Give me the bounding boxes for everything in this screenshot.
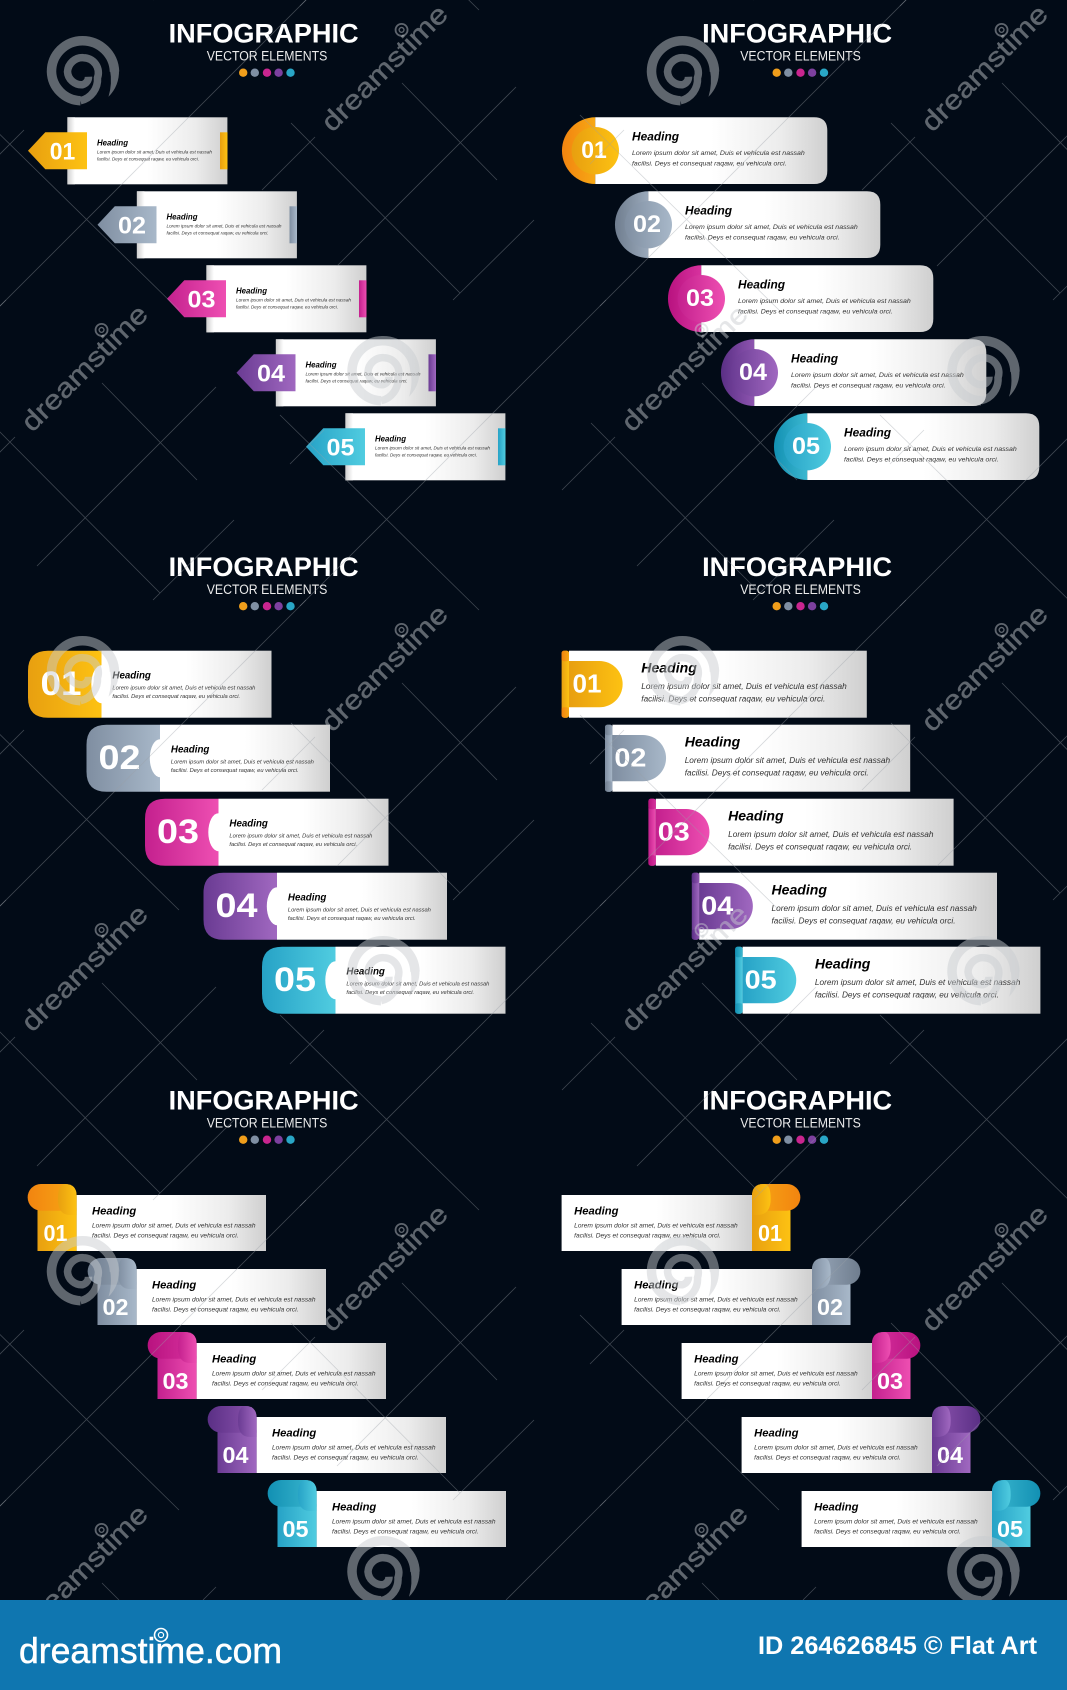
card 05 — [306, 413, 506, 480]
card 02: 02 — [633, 211, 661, 238]
card 05: facilisi. Deys et consequat raqaw, eu vehicula orci. — [346, 990, 474, 996]
panel: large number cards — [28, 552, 506, 1014]
card 03 — [648, 799, 954, 866]
card 01: Heading — [97, 139, 128, 148]
card 01: Lorem ipsum dolor sit amet, Duis et vehicula est nassah — [92, 1223, 256, 1230]
card 04: Heading — [771, 882, 827, 898]
card 03: facilisi. Deys et consequat raqaw, eu vehicula orci. — [694, 1380, 841, 1387]
card 02: Lorem ipsum dolor sit amet, Duis et vehicula est nassah — [166, 224, 282, 228]
card 01: Lorem ipsum dolor sit amet, Duis et vehicula est nassah — [97, 150, 212, 154]
watermark text: dreamstime — [15, 299, 154, 437]
title block — [169, 1086, 359, 1144]
title block: INFOGRAPHIC — [702, 1086, 892, 1116]
title block: VECTOR ELEMENTS — [207, 49, 327, 64]
title block — [169, 19, 359, 77]
card 01: Heading — [92, 1205, 137, 1217]
card 03: 03 — [686, 285, 714, 312]
card 02 — [605, 725, 910, 792]
card 05 — [735, 947, 1040, 1014]
card 02: Lorem ipsum dolor sit amet, Duis et vehicula est nassah — [685, 224, 858, 231]
card 04: facilisi. Deys et consequat raqaw, eu vehicula orci. — [288, 916, 416, 922]
footer banner — [0, 1600, 1067, 1690]
card 03: Heading — [694, 1353, 739, 1365]
card 04 — [721, 339, 986, 406]
card 05: facilisi. Deys et consequat raqaw, eu vehicula orci. — [375, 452, 477, 458]
card 05: Lorem ipsum dolor sit amet, Duis et vehicula est nassah — [815, 978, 1021, 987]
card 04: Lorem ipsum dolor sit amet, Duis et vehicula est nassah — [272, 1445, 436, 1452]
card 02 — [86, 725, 330, 792]
card 02: facilisi. Deys et consequat raqaw, eu vehicula orci. — [685, 768, 869, 777]
watermark text: dreamstime — [15, 899, 154, 1037]
card 01: Lorem ipsum dolor sit amet, Duis et vehicula est nassah — [112, 685, 255, 691]
footer logo: dreamstime.com — [19, 1630, 282, 1671]
card 04: Lorem ipsum dolor sit amet, Duis et vehicula est nassah — [791, 372, 964, 379]
watermark text: dreamstime — [315, 1199, 454, 1337]
card 02: 02 — [817, 1294, 843, 1320]
card 02 — [615, 191, 880, 258]
card 03 — [148, 1332, 386, 1399]
card 05: facilisi. Deys et consequat raqaw, eu vehicula orci. — [844, 456, 999, 463]
card 02 — [88, 1258, 326, 1325]
watermark text: dreamstime — [315, 599, 454, 737]
card 03: Heading — [236, 287, 267, 296]
card 04: facilisi. Deys et consequat raqaw, eu vehicula orci. — [771, 916, 955, 925]
card 03: Heading — [229, 818, 268, 829]
card 05: 05 — [745, 965, 777, 995]
card 05 — [774, 413, 1039, 480]
card 04 — [208, 1406, 446, 1473]
card 01: facilisi. Deys et consequat raqaw, eu vehicula orci. — [632, 160, 787, 167]
card 03: Lorem ipsum dolor sit amet, Duis et vehicula est nassah — [229, 833, 372, 839]
title block: VECTOR ELEMENTS — [207, 582, 327, 597]
title block: INFOGRAPHIC — [169, 1086, 359, 1116]
card 05: Heading — [815, 956, 871, 972]
watermark text: dreamstime — [915, 0, 1054, 137]
card 02 — [622, 1258, 860, 1325]
card 05: Heading — [844, 426, 892, 440]
card 04 — [236, 339, 436, 406]
title block — [169, 552, 359, 610]
card 02: facilisi. Deys et consequat raqaw, eu vehicula orci. — [634, 1306, 781, 1313]
card 03: Lorem ipsum dolor sit amet, Duis et vehicula est nassah — [212, 1371, 376, 1378]
card 05: Heading — [346, 966, 385, 977]
card 05: 05 — [792, 433, 820, 460]
card 01: 01 — [758, 1220, 782, 1246]
card 03: 03 — [157, 813, 199, 851]
card 04: Heading — [791, 352, 839, 366]
title block: INFOGRAPHIC — [702, 19, 892, 49]
card 02: Lorem ipsum dolor sit amet, Duis et vehicula est nassah — [634, 1297, 798, 1304]
card 05: 05 — [997, 1516, 1023, 1542]
card 02: Heading — [171, 744, 209, 755]
card 04 — [692, 873, 997, 940]
card 05 — [262, 947, 506, 1014]
card 04 — [204, 873, 447, 940]
card 01: 01 — [572, 669, 602, 699]
card 05: facilisi. Deys et consequat raqaw, eu vehicula orci. — [814, 1528, 961, 1535]
card 03 — [167, 265, 366, 332]
card 05 — [268, 1480, 506, 1547]
card 05: Heading — [814, 1501, 859, 1513]
card 02: Heading — [685, 204, 733, 218]
card 02: Heading — [166, 213, 198, 222]
card 01: Lorem ipsum dolor sit amet, Duis et vehicula est nassah — [574, 1223, 738, 1230]
card 04 — [742, 1406, 980, 1473]
card 01: Heading — [632, 130, 680, 144]
title block: INFOGRAPHIC — [169, 19, 359, 49]
card 04: Heading — [754, 1427, 799, 1439]
card 01: Heading — [574, 1205, 619, 1217]
card 03: 03 — [162, 1368, 188, 1394]
card 05: Lorem ipsum dolor sit amet, Duis et vehicula est nassah — [375, 446, 490, 450]
panel: right scroll cards — [562, 1086, 1040, 1547]
card 04: Lorem ipsum dolor sit amet, Duis et vehicula est nassah — [771, 904, 977, 913]
card 01: 01 — [50, 138, 75, 165]
card 03: 03 — [658, 817, 690, 847]
card 03: Heading — [212, 1353, 257, 1365]
card 03: Heading — [728, 808, 784, 824]
card 02: 02 — [614, 743, 646, 773]
card 05: Lorem ipsum dolor sit amet, Duis et vehicula est nassah — [814, 1519, 978, 1526]
card 02 — [98, 191, 297, 258]
title block — [702, 1086, 892, 1144]
card 01: Lorem ipsum dolor sit amet, Duis et vehicula est nassah — [632, 150, 805, 157]
card 04: 04 — [739, 359, 768, 386]
title block — [702, 552, 892, 610]
card 04: Heading — [272, 1427, 317, 1439]
card 04: Heading — [288, 892, 326, 903]
footer image id: ID 264626845 © Flat Art — [758, 1632, 1038, 1660]
card 03: facilisi. Deys et consequat raqaw, eu vehicula orci. — [738, 308, 893, 315]
watermark text: dreamstime — [15, 1499, 154, 1637]
card 04: facilisi. Deys et consequat raqaw, eu vehicula orci. — [791, 382, 946, 389]
card 03: Heading — [738, 278, 786, 292]
watermark text: dreamstime — [915, 599, 1054, 737]
card 01: 01 — [40, 665, 82, 703]
card 05: facilisi. Deys et consequat raqaw, eu vehicula orci. — [815, 990, 999, 999]
card 02: 02 — [118, 212, 146, 239]
panel: arrow tag cards — [28, 19, 506, 480]
title block: INFOGRAPHIC — [169, 552, 359, 582]
watermark text: dreamstime — [615, 899, 754, 1037]
card 03 — [145, 799, 388, 866]
card 03: Lorem ipsum dolor sit amet, Duis et vehicula est nassah — [236, 298, 351, 302]
card 04: 04 — [216, 887, 258, 925]
card 01: facilisi. Deys et consequat raqaw, eu vehicula orci. — [97, 156, 199, 162]
card 01: Lorem ipsum dolor sit amet, Duis et vehicula est nassah — [641, 682, 847, 691]
watermark text: dreamstime — [915, 1199, 1054, 1337]
card 01: facilisi. Deys et consequat raqaw, eu vehicula orci. — [92, 1232, 238, 1239]
card 04: Lorem ipsum dolor sit amet, Duis et vehicula est nassah — [306, 372, 421, 376]
watermark text: dreamstime — [315, 0, 454, 137]
card 01 — [562, 1184, 800, 1251]
title block: VECTOR ELEMENTS — [740, 1116, 861, 1131]
card 04: Heading — [306, 361, 337, 370]
title block: INFOGRAPHIC — [702, 552, 892, 582]
card 03: facilisi. Deys et consequat raqaw, eu vehicula orci. — [212, 1380, 358, 1387]
title block: VECTOR ELEMENTS — [740, 49, 861, 64]
card 01: facilisi. Deys et consequat raqaw, eu vehicula orci. — [574, 1232, 721, 1239]
card 03: 03 — [188, 286, 216, 313]
card 05 — [802, 1480, 1040, 1547]
card 05: 05 — [282, 1516, 309, 1542]
card 02: 02 — [98, 739, 140, 777]
card 03: 03 — [877, 1368, 903, 1394]
title block: VECTOR ELEMENTS — [207, 1116, 327, 1131]
title block: VECTOR ELEMENTS — [740, 582, 861, 597]
card 04: Lorem ipsum dolor sit amet, Duis et vehicula est nassah — [288, 907, 431, 913]
card 01 — [562, 651, 867, 718]
card 03: Lorem ipsum dolor sit amet, Duis et vehicula est nassah — [728, 830, 934, 839]
card 03: Lorem ipsum dolor sit amet, Duis et vehicula est nassah — [738, 298, 911, 305]
card 01 — [28, 117, 228, 184]
card 05: 05 — [274, 961, 316, 999]
card 04: facilisi. Deys et consequat raqaw, eu vehicula orci. — [754, 1454, 901, 1461]
card 04: 04 — [701, 891, 734, 921]
card 04: 04 — [222, 1442, 249, 1468]
card 01: 01 — [44, 1220, 68, 1246]
card 01: facilisi. Deys et consequat raqaw, eu vehicula orci. — [112, 694, 240, 700]
card 03: Lorem ipsum dolor sit amet, Duis et vehicula est nassah — [694, 1371, 858, 1378]
card 02: facilisi. Deys et consequat raqaw, eu vehicula orci. — [171, 768, 299, 774]
panel: left scroll cards — [28, 1086, 506, 1547]
card 04: Lorem ipsum dolor sit amet, Duis et vehicula est nassah — [754, 1445, 918, 1452]
card 02: Lorem ipsum dolor sit amet, Duis et vehicula est nassah — [152, 1297, 316, 1304]
card 05: Lorem ipsum dolor sit amet, Duis et vehicula est nassah — [844, 446, 1017, 453]
card 03 — [668, 265, 933, 332]
card 05: Heading — [375, 435, 406, 444]
card 01: facilisi. Deys et consequat raqaw, eu vehicula orci. — [641, 694, 825, 703]
card 02: Lorem ipsum dolor sit amet, Duis et vehicula est nassah — [171, 759, 314, 765]
card 01 — [562, 117, 827, 184]
watermark text: dreamstime — [615, 299, 754, 437]
card 05: Heading — [332, 1501, 377, 1513]
card 02: Heading — [685, 734, 741, 750]
card 01 — [28, 651, 272, 718]
card 04: 04 — [937, 1442, 963, 1468]
card 01: Heading — [641, 660, 697, 676]
card 02: facilisi. Deys et consequat raqaw, eu vehicula orci. — [166, 230, 268, 236]
card 02: Heading — [152, 1279, 197, 1291]
title block — [702, 19, 892, 77]
card 02: Heading — [634, 1279, 679, 1291]
card 04: facilisi. Deys et consequat raqaw, eu vehicula orci. — [306, 378, 408, 384]
card 05: Lorem ipsum dolor sit amet, Duis et vehicula est nassah — [332, 1519, 496, 1526]
card 02: facilisi. Deys et consequat raqaw, eu vehicula orci. — [685, 234, 840, 241]
panel: rounded circle cards — [562, 19, 1039, 480]
card 02: facilisi. Deys et consequat raqaw, eu vehicula orci. — [152, 1306, 298, 1313]
card 04: facilisi. Deys et consequat raqaw, eu vehicula orci. — [272, 1454, 418, 1461]
card 05: Lorem ipsum dolor sit amet, Duis et vehicula est nassah — [346, 981, 489, 987]
card 05: facilisi. Deys et consequat raqaw, eu vehicula orci. — [332, 1528, 478, 1535]
card 05: 05 — [326, 434, 354, 461]
card 01 — [28, 1184, 266, 1251]
watermark text: dreamstime — [615, 1499, 754, 1637]
card 03 — [682, 1332, 920, 1399]
card 02: 02 — [102, 1294, 128, 1320]
card 03: facilisi. Deys et consequat raqaw, eu vehicula orci. — [236, 304, 338, 310]
card 02: Lorem ipsum dolor sit amet, Duis et vehicula est nassah — [685, 756, 891, 765]
card 04: 04 — [257, 360, 286, 387]
card 01: 01 — [581, 137, 607, 164]
panel: strip and tab cards — [562, 552, 1040, 1014]
card 01: Heading — [112, 670, 151, 681]
card 03: facilisi. Deys et consequat raqaw, eu vehicula orci. — [728, 842, 912, 851]
card 03: facilisi. Deys et consequat raqaw, eu vehicula orci. — [229, 842, 357, 848]
